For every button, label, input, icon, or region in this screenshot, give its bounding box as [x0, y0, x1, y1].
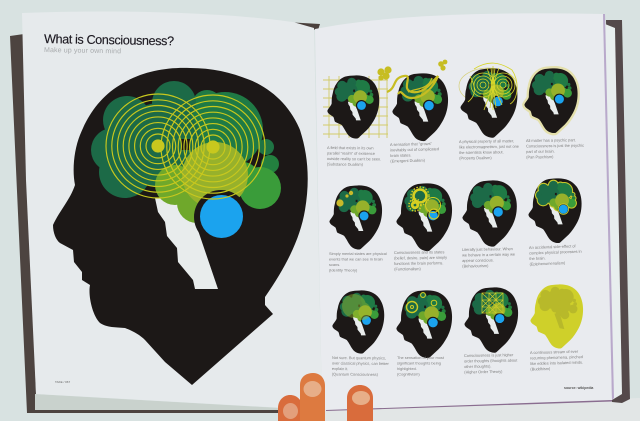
- caption: inevitably out of complicated: [390, 146, 439, 152]
- page edge purple bottom: [326, 400, 612, 411]
- caption: the brain.: [529, 255, 546, 261]
- caption: (Property Dualism): [459, 155, 492, 160]
- lime overlay: [342, 294, 371, 320]
- caption: Consciousness is just higher: [464, 352, 514, 358]
- caption: (belief, desire, pain) are simply: [394, 255, 447, 260]
- caption: scans.: [329, 262, 340, 267]
- caption: (Emergent Dualism): [390, 158, 426, 163]
- head: [329, 185, 382, 250]
- subtitle: Make up your own mind: [44, 47, 121, 55]
- caption: Literally just behaviour. When: [462, 246, 513, 252]
- head: [327, 75, 379, 139]
- page number: TAKE / 067: [55, 380, 70, 384]
- source note: source: wikipedia: [564, 386, 593, 390]
- caption: A sensation that "grows": [390, 141, 433, 147]
- panel: cognitivism: [396, 290, 452, 376]
- caption: outside reality so can't be seen.: [327, 156, 381, 161]
- caption: explain it.: [332, 366, 348, 371]
- thought lattice: [482, 293, 503, 313]
- caption: Not sure. But quantum physics,: [332, 355, 386, 360]
- head: [396, 290, 452, 358]
- page edge lilac: [603, 14, 614, 400]
- panel: quantum consciousness: [332, 290, 390, 377]
- panel: behaviourism: [462, 180, 517, 268]
- title: What is Consciousness?: [44, 32, 174, 48]
- caption: complex physical processes in: [529, 249, 582, 255]
- caption: (Identity Theory): [329, 268, 358, 272]
- panel: substance dualism: [323, 75, 388, 167]
- caption: we behave in a certain way we: [462, 252, 515, 257]
- yellow head: [530, 284, 583, 349]
- panel: property dualism: [459, 63, 519, 160]
- caption: Consciousness is just the psychic: [526, 143, 584, 148]
- caption: events that we can see in brain: [329, 256, 383, 262]
- caption: (Pan Psychism): [526, 154, 554, 159]
- caption: significant thoughts being: [397, 360, 441, 366]
- panel: pan psychism: [524, 68, 584, 159]
- caption: like eddies into isolated minds.: [530, 360, 583, 366]
- grid backdrop: [323, 76, 388, 138]
- caption: Consciousness and its states: [394, 249, 444, 255]
- head: [462, 180, 517, 247]
- field arcs behind: [459, 68, 517, 104]
- panel: identity theory: [329, 185, 387, 272]
- caption: order thoughts (thoughts about: [464, 358, 518, 363]
- caption: appear conscious.: [462, 257, 494, 263]
- floor below right page: [320, 398, 640, 421]
- head with halo: [524, 68, 578, 133]
- caption: (Higher Order Theory): [464, 369, 503, 374]
- caption: (Cognitivism): [397, 372, 420, 376]
- left inner strip: [35, 394, 280, 410]
- caption: parallel "realm" of existence: [327, 150, 375, 156]
- left page: [22, 11, 322, 408]
- fingers: [278, 373, 373, 421]
- caption: other thoughts).: [464, 364, 491, 369]
- left cover: [10, 34, 280, 413]
- panel: functionalism: [394, 183, 452, 271]
- head: [392, 73, 448, 141]
- right cover: [606, 20, 630, 403]
- brain scan highlights: [336, 191, 353, 207]
- highlighted thoughts: [406, 293, 437, 312]
- caption: A continuous stream of ever: [530, 349, 579, 355]
- caption: brain states.: [390, 152, 412, 158]
- right page: [315, 13, 612, 410]
- caption: All matter has a psychic part.: [526, 137, 576, 143]
- head: [460, 68, 517, 138]
- cover top by spine: [285, 22, 320, 30]
- gears: [409, 187, 440, 219]
- magnetic field lines: [468, 63, 517, 110]
- head: [464, 287, 518, 353]
- caption: functions the brain performs.: [394, 260, 443, 266]
- panel: higher order theory: [464, 287, 518, 374]
- head with outlined brain: [528, 178, 582, 243]
- head: [332, 290, 384, 354]
- caption: (Behaviourism): [462, 263, 489, 268]
- large head illustration: [53, 68, 308, 385]
- caption: like electromagnetism, just not one: [459, 144, 519, 149]
- caption: The sensation of your most: [397, 355, 445, 360]
- ribbon and flowers: [377, 60, 447, 98]
- right page block: [605, 24, 622, 400]
- caption: recurring phenomena, pinched: [530, 354, 583, 360]
- caption: (Buddhism): [530, 366, 551, 371]
- caption: over classical physics, can better: [332, 360, 390, 366]
- caption: (Substance Dualism): [327, 161, 364, 167]
- concentric rings: [106, 94, 265, 199]
- caption: (Quantum Consciousness): [332, 371, 379, 377]
- caption: (Functionalism): [394, 266, 422, 271]
- panel: buddhism: [530, 284, 583, 371]
- caption: A physical property of all matter,: [459, 138, 514, 144]
- head: [396, 183, 452, 251]
- caption: highlighted.: [397, 366, 417, 371]
- caption: (Epiphenomenalism): [529, 260, 566, 266]
- caption: part of our brain.: [526, 149, 555, 154]
- caption: Simply mental states are physical: [329, 251, 387, 256]
- panel: emergent dualism: [377, 60, 448, 163]
- caption: An accidental side-effect of: [529, 243, 577, 250]
- caption: A field that exists in its own: [327, 145, 374, 150]
- caption: the scientists know about.: [459, 149, 504, 155]
- panel: epiphenomenalism: [528, 178, 582, 266]
